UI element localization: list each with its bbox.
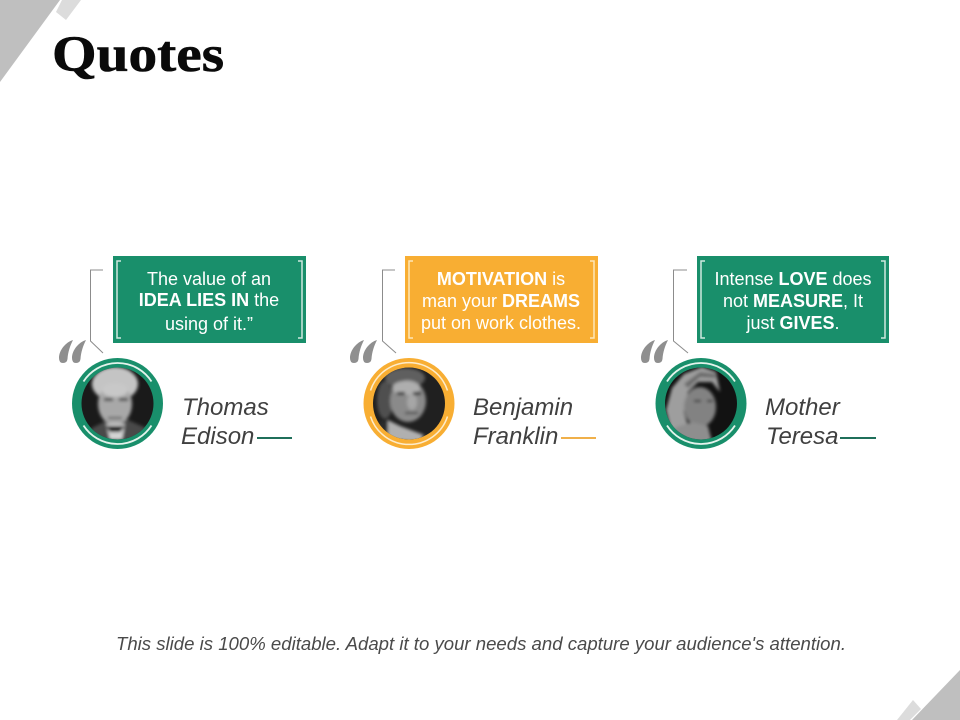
inner brackets xyxy=(701,261,885,338)
portrait: Thomas Edison xyxy=(81,367,154,440)
name: Benjamin Franklin: Franklin xyxy=(473,423,558,450)
inner brackets xyxy=(117,261,302,338)
accent line xyxy=(257,437,292,439)
title: Quotes xyxy=(52,27,224,83)
quote text: Intense LOVE does xyxy=(714,269,872,289)
quote box xyxy=(405,256,598,343)
name: Mother Teresa: Teresa xyxy=(766,423,838,450)
connector line xyxy=(90,270,103,353)
accent line xyxy=(840,437,876,439)
connector line xyxy=(674,270,688,353)
icon: portrait ring xyxy=(72,358,163,449)
quote text: just GIVES. xyxy=(746,313,840,333)
quote text: using of it.” xyxy=(165,314,253,334)
panel: Mother Teresa quote xyxy=(641,256,889,450)
quote box xyxy=(697,256,889,343)
icon: quotation mark xyxy=(59,340,86,363)
quote text: MOTIVATION is xyxy=(437,269,565,289)
name: Thomas Edison: Edison xyxy=(181,423,254,450)
inner brackets xyxy=(409,261,594,338)
quote text: put on work clothes. xyxy=(421,313,581,333)
portrait: Benjamin Franklin xyxy=(372,367,446,442)
panel: Thomas Edison quote xyxy=(59,256,306,450)
icon: portrait ring xyxy=(364,358,454,449)
quote text: IDEA LIES IN the xyxy=(139,290,279,310)
footer text: This slide is 100% editable. Adapt it to your needs and capture your audience's attention. xyxy=(116,634,846,654)
name: Benjamin Franklin: Benjamin xyxy=(473,394,573,421)
quote text: man your DREAMS xyxy=(422,291,580,311)
panel: Benjamin Franklin quote xyxy=(350,256,598,450)
decoration: top-left corner xyxy=(0,0,81,82)
name: Thomas Edison: Thomas xyxy=(182,394,269,421)
name: Mother Teresa: Mother xyxy=(765,394,841,421)
icon: quotation mark xyxy=(641,340,668,363)
quote text: The value of an xyxy=(147,269,271,289)
connector line xyxy=(382,270,396,353)
portrait: Mother Teresa xyxy=(664,367,738,442)
decoration: bottom-right corner xyxy=(897,670,960,720)
quote box xyxy=(113,256,306,343)
icon: portrait ring xyxy=(656,358,746,449)
accent line xyxy=(561,437,596,439)
icon: quotation mark xyxy=(350,340,377,363)
quote text: not MEASURE, It xyxy=(723,291,863,311)
